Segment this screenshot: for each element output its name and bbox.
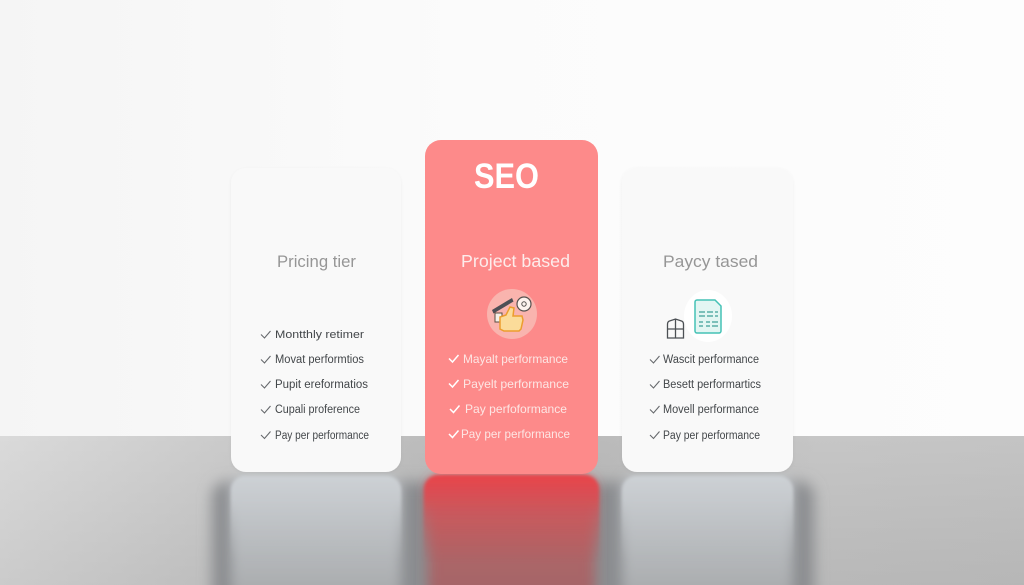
feature list: paycy tased: [650, 354, 761, 442]
feature list: pricing tier: Pupit ereformatios: [275, 379, 368, 391]
feature list: paycy tased: Wascit performance: [663, 354, 759, 366]
feature list: project based: Pay perfoformance: [465, 402, 567, 416]
feature list: project based: Pay per performance: [461, 427, 570, 441]
panel: pricing tier card: [231, 168, 401, 472]
card reflections on floor: [212, 475, 814, 585]
reflective floor: [0, 436, 1024, 585]
feature list: paycy tased: Pay per performance: [663, 430, 760, 442]
infographic scene: [0, 140, 1024, 585]
feature list: pricing tier: [261, 329, 369, 442]
panel: paycy tased card: [622, 168, 793, 472]
feature list: pricing tier: Montthly retimer: [275, 329, 364, 341]
feature list: pricing tier: Cupali proference: [275, 404, 360, 416]
heading: project based: Project based: [461, 251, 570, 271]
panel: project based card: [425, 140, 598, 474]
feature list: project based: [449, 352, 570, 441]
heading: paycy tased: Paycy tased: [663, 252, 758, 271]
title: SEO: SEO: [474, 157, 539, 196]
feature list: pricing tier: Movat performtios: [275, 354, 364, 366]
feature list: project based: Payelt performance: [463, 377, 569, 391]
feature list: pricing tier: Pay per performance: [275, 430, 369, 442]
icon: thumbs up: [487, 289, 537, 339]
feature list: project based: Mayalt performance: [463, 352, 568, 366]
background wall: [0, 0, 1024, 437]
heading: pricing tier: Pricing tier: [277, 252, 356, 271]
icon: small building: [668, 319, 684, 338]
feature list: paycy tased: Movell performance: [663, 404, 759, 416]
icon: document in glow: [684, 290, 732, 342]
feature list: paycy tased: Besett performartics: [663, 379, 761, 391]
